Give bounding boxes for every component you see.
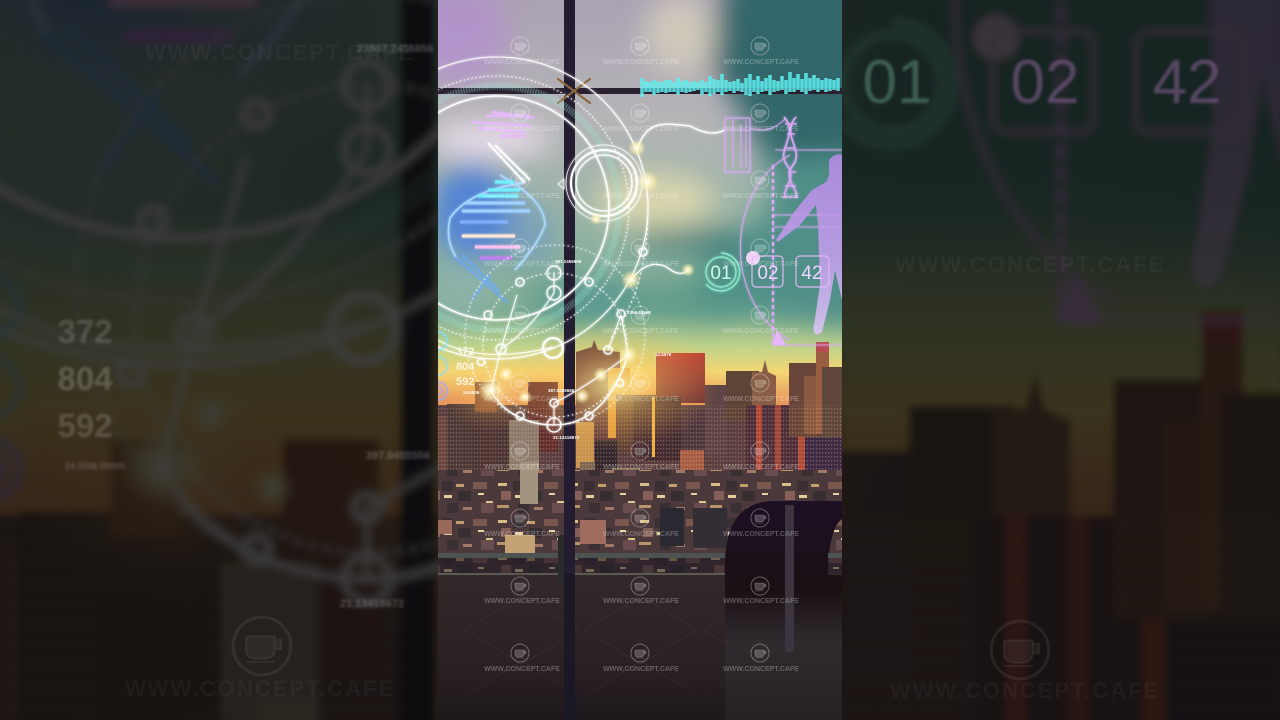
HUD data readouts: 397.2456856 <box>555 259 582 264</box>
watermark text: WWW.CONCEPT.CAFE <box>723 666 799 673</box>
main window artwork <box>438 0 842 720</box>
watermark text: WWW.CONCEPT.CAFE <box>484 193 560 200</box>
left panel watermark: WWW.CONCEPT.CAFE <box>145 40 415 65</box>
watermark text: WWW.CONCEPT.CAFE <box>603 328 679 335</box>
HUD data readouts: 24.5536 <box>463 390 480 395</box>
readout numbers: 42 <box>801 263 823 284</box>
frame bracket <box>558 79 590 103</box>
right panel watermark: WWW.CONCEPT.CAFE <box>890 678 1160 703</box>
left panel HUD readouts: 23597.2456856 <box>357 43 433 55</box>
watermark text: WWW.CONCEPT.CAFE <box>484 328 560 335</box>
left panel HUD readouts: 804 <box>57 360 113 397</box>
watermark text: WWW.CONCEPT.CAFE <box>484 126 560 133</box>
watermark text: WWW.CONCEPT.CAFE <box>603 396 679 403</box>
readout boxes 02 and 42 <box>752 256 829 287</box>
watermark text: WWW.CONCEPT.CAFE <box>484 598 560 605</box>
watermark text: WWW.CONCEPT.CAFE <box>484 59 560 66</box>
left panel HUD readouts: 397.0455556 <box>366 450 430 462</box>
watermark text: WWW.CONCEPT.CAFE <box>484 464 560 471</box>
HUD rings and network <box>346 57 725 432</box>
HUD data readouts: 12.5576 <box>655 352 672 357</box>
HUD data readouts: 21.13418672 <box>553 435 580 440</box>
readout numbers <box>710 263 823 284</box>
interior wall below window <box>438 575 725 720</box>
left panel watermark: WWW.CONCEPT.CAFE <box>125 676 395 701</box>
readout numbers: 01 <box>710 263 732 284</box>
HUD data readouts: 372 <box>456 346 474 358</box>
panel: central window scene <box>346 0 900 720</box>
right panel numeric readouts: 01 <box>863 48 931 117</box>
left panel HUD readouts: 592 <box>57 407 113 444</box>
readout numbers: 02 <box>757 263 779 284</box>
watermark text: WWW.CONCEPT.CAFE <box>723 464 799 471</box>
watermark text: WWW.CONCEPT.CAFE <box>603 666 679 673</box>
watermark icons <box>511 37 769 662</box>
watermark text: WWW.CONCEPT.CAFE <box>484 666 560 673</box>
glowing nodes <box>478 139 760 404</box>
window frame <box>438 0 842 720</box>
watermark text: WWW.CONCEPT.CAFE <box>484 396 560 403</box>
HUD data readouts: 397.0455556 <box>548 388 575 393</box>
watermark text: WWW.CONCEPT.CAFE <box>484 531 560 538</box>
window rails <box>438 505 842 652</box>
left panel HUD readouts <box>57 43 433 610</box>
watermark text: WWW.CONCEPT.CAFE <box>603 464 679 471</box>
sky <box>408 0 900 480</box>
right panel watermark: WWW.CONCEPT.CAFE <box>895 252 1165 277</box>
right panel numeric readouts <box>863 48 1221 117</box>
watermark text: WWW.CONCEPT.CAFE <box>603 261 679 268</box>
left panel HUD readouts: 372 <box>57 313 113 350</box>
HUD data readouts <box>456 259 672 440</box>
watermark text: WWW.CONCEPT.CAFE <box>603 59 679 66</box>
watermark text: WWW.CONCEPT.CAFE <box>723 598 799 605</box>
left panel watermark <box>125 40 415 701</box>
watermark text: WWW.CONCEPT.CAFE <box>723 261 799 268</box>
DNA helix hologram <box>448 112 545 303</box>
holographic human figure panel <box>725 117 842 345</box>
HUD data readouts: 2359.24568 <box>627 310 651 315</box>
left panel HUD readouts: 21.13418672 <box>340 598 404 610</box>
watermark text: WWW.CONCEPT.CAFE <box>723 59 799 66</box>
watermark text: WWW.CONCEPT.CAFE <box>603 598 679 605</box>
HUD data readouts: 592 <box>456 376 474 388</box>
watermark text: WWW.CONCEPT.CAFE <box>603 531 679 538</box>
right panel numeric readouts: 02 <box>1011 48 1079 117</box>
watermark text: WWW.CONCEPT.CAFE <box>723 396 799 403</box>
watermark text: WWW.CONCEPT.CAFE <box>603 126 679 133</box>
watermark text: WWW.CONCEPT.CAFE <box>723 193 799 200</box>
watermark text: WWW.CONCEPT.CAFE <box>603 193 679 200</box>
office chair silhouette <box>725 501 842 695</box>
watermark text: WWW.CONCEPT.CAFE <box>723 531 799 538</box>
readout 01 ring <box>706 253 740 291</box>
human body silhouette <box>776 154 842 335</box>
panel: left blurred zoom of the scene <box>0 0 438 720</box>
HUD data readouts: 804 <box>456 361 475 373</box>
panel: right blurred zoom of the scene <box>842 0 1280 720</box>
right panel numeric readouts: 42 <box>1153 48 1221 117</box>
audio waveform <box>642 72 838 97</box>
watermark text <box>484 59 799 673</box>
right panel watermark <box>890 252 1165 703</box>
watermark text: WWW.CONCEPT.CAFE <box>484 261 560 268</box>
left panel HUD readouts: 24.5536.00000 <box>65 461 125 471</box>
city skyline <box>438 320 842 575</box>
watermark text: WWW.CONCEPT.CAFE <box>723 126 799 133</box>
watermark text: WWW.CONCEPT.CAFE <box>723 328 799 335</box>
